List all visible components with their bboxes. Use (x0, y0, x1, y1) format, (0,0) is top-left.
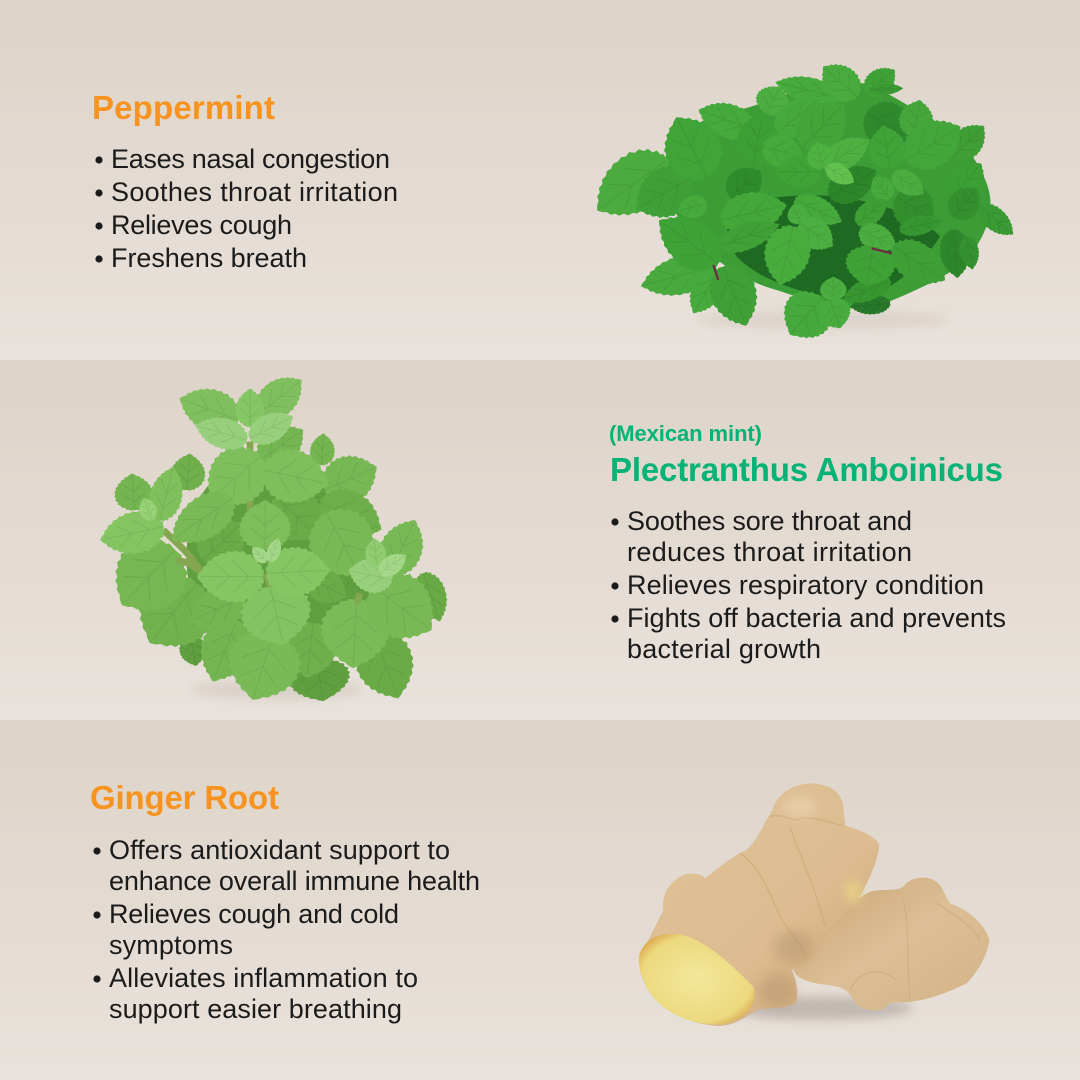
panel: peppermint (0, 0, 1080, 360)
subheading: Mexican mint: (Mexican mint) (609, 421, 762, 446)
bullet list: ginger benefits: Offers antioxidant support to (109, 835, 450, 865)
cut yellow face (639, 934, 754, 1024)
bullet list: ginger benefits: enhance overall immune health (109, 866, 480, 896)
bullet list: ginger benefits (93, 835, 480, 1024)
illustration: peppermint bunch (580, 54, 1021, 351)
panel: plectranthus amboinicus (0, 360, 1080, 720)
rear ginger piece (793, 878, 989, 1010)
front ginger piece (639, 783, 879, 1026)
bullet list: plectranthus benefits: reduces throat irritation (627, 537, 912, 567)
heading: Peppermint: Peppermint (92, 89, 275, 126)
bullet list: ginger benefits: Relieves cough and cold (109, 899, 399, 929)
bullet list: plectranthus benefits: Soothes sore throat and (627, 506, 912, 536)
heading: Plectranthus Amboinicus: Plectranthus Amboinicus (610, 451, 1003, 488)
heading: Ginger Root: Ginger Root (90, 779, 279, 816)
bullet list: peppermint benefits (95, 144, 398, 273)
bullet list: peppermint benefits: Relieves cough (111, 210, 292, 240)
bullet list: peppermint benefits: Soothes throat irritation (111, 177, 398, 207)
bullet list: ginger benefits: symptoms (109, 930, 233, 960)
bullet list: plectranthus benefits: Relieves respiratory condition (627, 570, 984, 600)
bullet list: ginger benefits: Alleviates inflammation to (109, 963, 418, 993)
bullet list: peppermint benefits: Eases nasal congestion (111, 144, 390, 174)
panel: ginger root (0, 720, 1080, 1080)
illustration: ginger root (639, 783, 989, 1026)
bullet list: plectranthus benefits (611, 506, 1006, 664)
bullet list: ginger benefits: support easier breathing (109, 994, 402, 1024)
bullet list: peppermint benefits: Freshens breath (111, 243, 307, 273)
illustration: mexican mint plant (95, 365, 455, 711)
bullet list: plectranthus benefits: bacterial growth (627, 634, 821, 664)
bullet list: plectranthus benefits: Fights off bacteria and prevents (627, 603, 1006, 633)
